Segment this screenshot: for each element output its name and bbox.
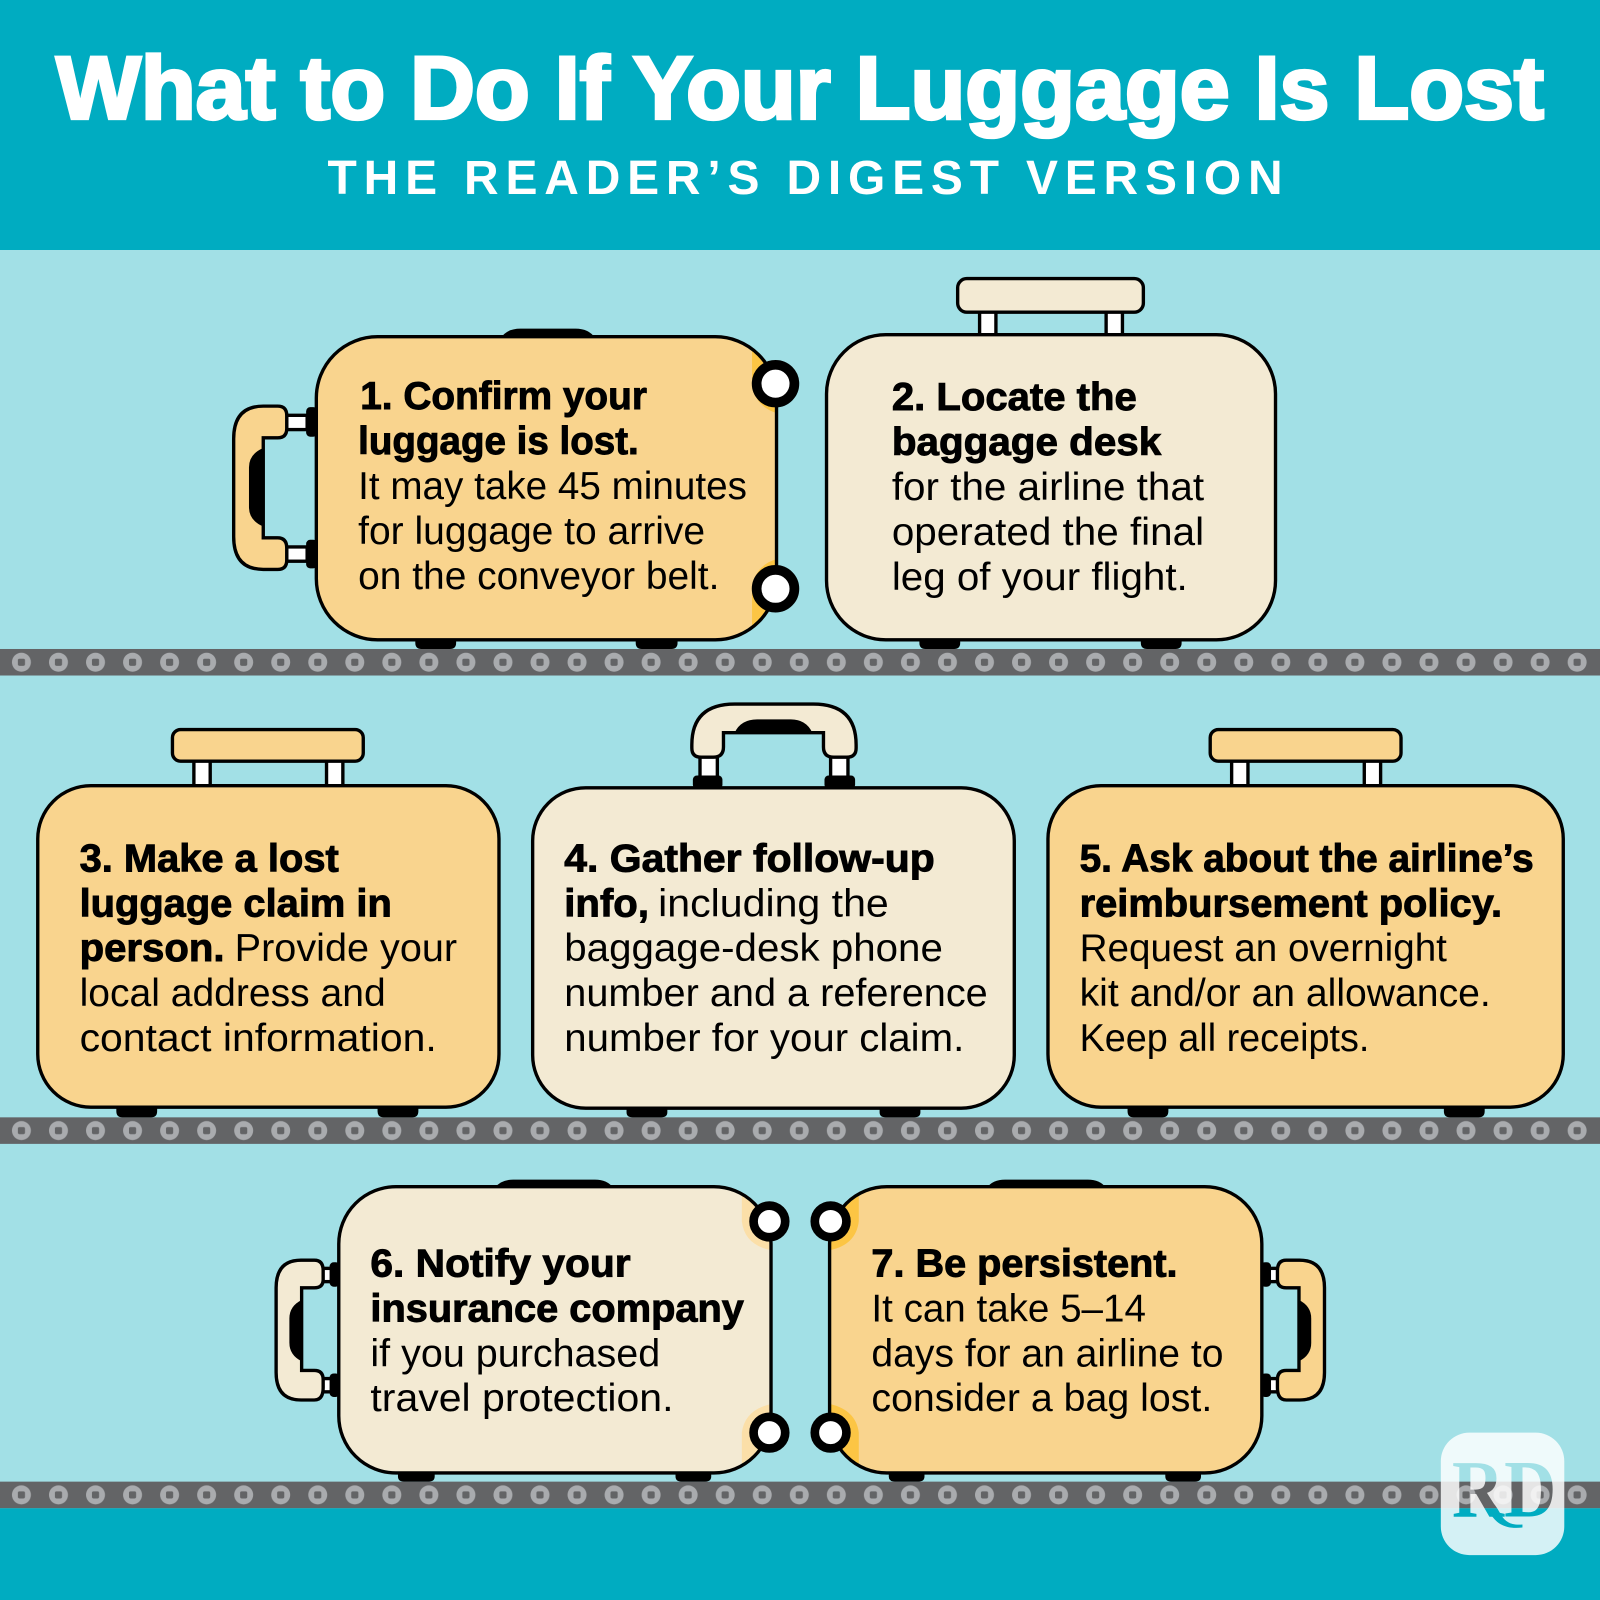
text: 3. Make a lost xyxy=(80,837,339,880)
feet xyxy=(919,637,1182,649)
suitcase 5: reimbursement xyxy=(1048,730,1563,1117)
text: 6. Notify your xyxy=(370,1243,631,1286)
text xyxy=(564,837,988,1060)
text: consider a bag lost. xyxy=(871,1377,1212,1420)
corner tints xyxy=(752,351,775,626)
suitcase 3: claim xyxy=(38,730,499,1117)
body xyxy=(339,1187,771,1473)
text: 5. Ask about the airline’s xyxy=(1080,837,1534,880)
top grip xyxy=(987,1180,1106,1188)
feet xyxy=(889,1471,1201,1482)
text: Request an overnight xyxy=(1080,927,1447,970)
text: reimbursement policy. xyxy=(1080,882,1502,925)
logo: RD xyxy=(1441,1433,1564,1555)
top grip xyxy=(501,329,595,338)
text: It may take 45 minutes xyxy=(358,465,747,508)
body outline xyxy=(316,337,777,640)
feet xyxy=(627,1106,920,1117)
text: travel protection. xyxy=(370,1377,673,1420)
text: operated the final xyxy=(892,511,1204,554)
suitcase 1: confirm xyxy=(234,329,794,649)
conveyor belt 3 xyxy=(0,1482,1600,1508)
suitcase 6: insurance xyxy=(276,1180,785,1482)
suitcase 2: baggage desk xyxy=(827,279,1276,649)
text: if you purchased xyxy=(370,1332,660,1375)
text: insurance company xyxy=(370,1287,744,1330)
text: luggage is lost. xyxy=(358,420,639,463)
feet xyxy=(398,1471,711,1482)
header band xyxy=(0,0,1600,250)
text: luggage claim in xyxy=(80,882,392,925)
text: number and a reference xyxy=(564,972,988,1015)
side handle xyxy=(276,1260,340,1400)
corner tints xyxy=(831,1196,859,1464)
top handle xyxy=(1210,730,1401,788)
title: What to Do If Your Luggage Is Lost xyxy=(56,38,1544,137)
text: 4. Gather follow-up xyxy=(564,837,935,880)
text xyxy=(1080,837,1534,1060)
body xyxy=(827,335,1276,640)
text: for the airline that xyxy=(892,466,1204,509)
text: number for your claim. xyxy=(564,1017,964,1060)
corner tints xyxy=(742,1196,770,1464)
text xyxy=(358,375,747,598)
feet xyxy=(1128,1105,1485,1117)
suitcase 4: follow-up info xyxy=(533,704,1014,1117)
body xyxy=(38,786,499,1107)
text: for luggage to arrive xyxy=(358,510,705,553)
text: local address and xyxy=(80,972,386,1015)
text: baggage desk xyxy=(892,421,1162,464)
side handle xyxy=(1261,1260,1324,1400)
text: 2. Locate the xyxy=(892,376,1137,419)
body xyxy=(830,1187,1262,1473)
text: kit and/or an allowance. xyxy=(1080,972,1491,1015)
suitcase 7: be persistent xyxy=(815,1180,1324,1482)
text: baggage-desk phone xyxy=(564,927,943,970)
top handle xyxy=(958,279,1143,337)
text: 7. Be persistent. xyxy=(871,1243,1178,1286)
text: person. xyxy=(80,927,224,970)
body xyxy=(533,788,1014,1108)
body outline xyxy=(339,1187,771,1473)
text: 1. Confirm your xyxy=(360,375,647,418)
text xyxy=(892,376,1204,599)
text: including the xyxy=(658,882,889,925)
wheels xyxy=(754,1206,785,1448)
feet xyxy=(116,1105,418,1117)
text: Provide your xyxy=(235,927,457,970)
conveyor belt 2 xyxy=(0,1117,1600,1144)
top handle xyxy=(172,730,363,788)
wheels xyxy=(815,1206,846,1448)
text: contact information. xyxy=(80,1017,437,1060)
text: leg of your flight. xyxy=(892,556,1188,599)
text xyxy=(871,1243,1223,1420)
top handle xyxy=(692,704,856,789)
body xyxy=(1048,786,1563,1107)
text xyxy=(80,837,457,1060)
side handle xyxy=(234,406,317,569)
bottom band xyxy=(0,1508,1600,1600)
text: on the conveyor belt. xyxy=(358,555,719,598)
text xyxy=(370,1243,744,1420)
wheels xyxy=(757,365,794,608)
conveyor belt 1 xyxy=(0,649,1600,676)
text: info, xyxy=(564,882,649,925)
feet xyxy=(415,637,678,649)
subtitle: THE READER’S DIGEST VERSION xyxy=(328,152,1283,205)
body xyxy=(316,337,777,640)
text: It can take 5–14 xyxy=(871,1287,1146,1330)
text: Keep all receipts. xyxy=(1080,1017,1369,1060)
body outline xyxy=(830,1187,1262,1473)
top grip xyxy=(495,1180,613,1188)
text: days for an airline to xyxy=(871,1332,1223,1375)
